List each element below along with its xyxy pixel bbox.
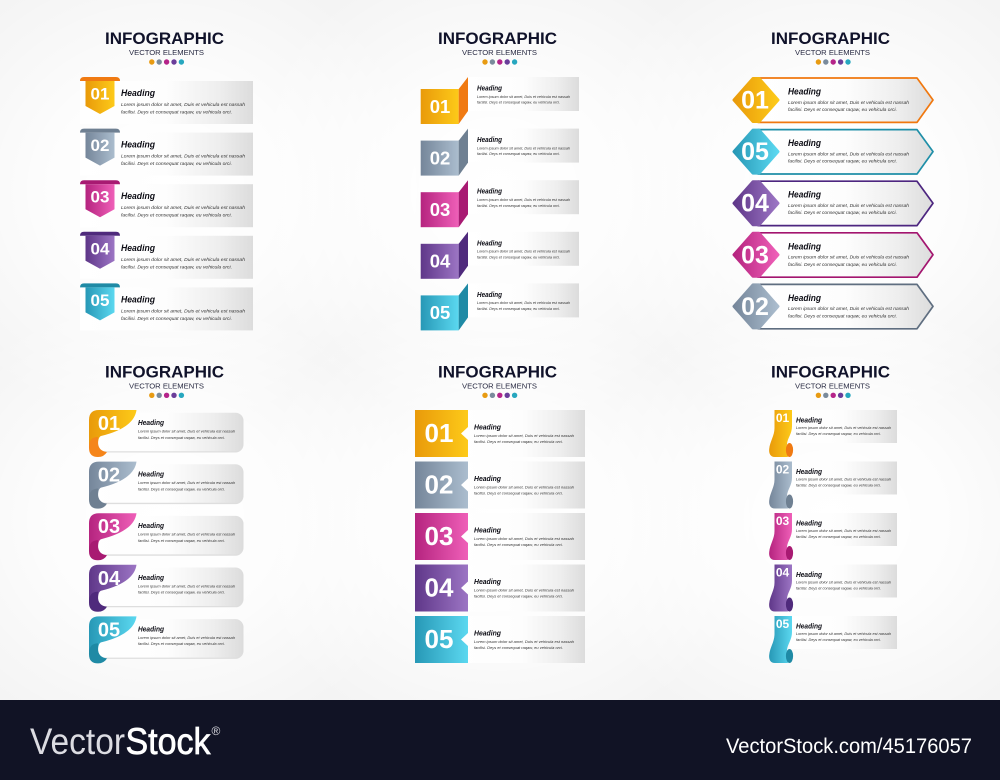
item 03 bookmark: 03	[91, 188, 109, 207]
footer bar	[0, 700, 1000, 780]
item 05 fold	[421, 283, 579, 330]
item 01 bookmark: 01	[91, 84, 109, 104]
item 01 fold: Lorem ipsum dolor sit amet, Duis et vehicula est nassah	[477, 94, 570, 99]
item 02 curl: Lorem ipsum dolor sit amet, Duis et vehicula est nassah	[138, 480, 235, 485]
item 03 fold	[421, 180, 579, 227]
item 05 block	[415, 616, 585, 663]
item 02 scroll: facilisi. Deys et consequat raqaw, eu vehicula orci.	[796, 482, 881, 488]
item 03 bookmark	[80, 180, 253, 227]
item 01 curl: Heading	[138, 420, 165, 427]
item 03 bookmark: Lorem ipsum dolor sit amet, Duis et vehicula est nassah	[121, 205, 245, 211]
item 02 curl: facilisi. Deys et consequat raqaw, eu vehicula orci.	[138, 486, 225, 491]
item 01 scroll: Lorem ipsum dolor sit amet, Duis et vehicula est nassah	[796, 425, 891, 430]
image id: VectorStock.com/45176057	[726, 735, 972, 758]
heading: panel 3 title: INFOGRAPHIC	[771, 29, 890, 48]
item 02 bookmark: 02	[91, 136, 109, 155]
item 02 fold: facilisi. Deys et consequat raqaw, eu vehicula orci.	[477, 151, 560, 156]
item 05 arrow: Lorem ipsum dolor sit amet, Duis et vehicula est nassah	[788, 151, 909, 157]
item 03 curl: 03	[98, 516, 120, 538]
item 04 arrow: 04	[741, 190, 769, 218]
item 05 curl	[89, 616, 244, 663]
item 05 arrow: 05	[741, 138, 769, 166]
item 04 fold: Heading	[477, 240, 503, 247]
item 01 bookmark	[80, 77, 253, 124]
item 01 scroll: Heading	[796, 418, 823, 424]
item 03 arrow: Heading	[788, 241, 821, 251]
item 05 fold: 05	[430, 302, 450, 323]
item 04 scroll: 04	[776, 565, 789, 579]
item 04 fold: 04	[430, 251, 451, 272]
heading: panel 4 title	[105, 362, 224, 398]
logo: VectorStock: Stock	[126, 721, 211, 762]
item 01 block: 01	[425, 418, 453, 448]
item 02 arrow: 02	[741, 293, 769, 321]
item 04 scroll: facilisi. Deys et consequat raqaw, eu vehicula orci.	[796, 586, 881, 590]
item 05 curl: Lorem ipsum dolor sit amet, Duis et vehicula est nassah	[138, 635, 235, 640]
item 01 arrow: Heading	[788, 86, 821, 96]
item 04 bookmark	[80, 232, 253, 279]
item 01 scroll: facilisi. Deys et consequat raqaw, eu vehicula orci.	[796, 431, 881, 436]
item 04 block: 04	[425, 572, 454, 602]
item 04 bookmark: facilisi. Deys et consequat raqaw, eu vehicula orci.	[121, 264, 232, 270]
item 02 scroll: Lorem ipsum dolor sit amet, Duis et vehicula est nassah	[796, 476, 891, 482]
item 03 arrow: facilisi. Deys et consequat raqaw, eu vehicula orci.	[788, 262, 897, 268]
heading: panel 4 title: INFOGRAPHIC	[105, 362, 224, 381]
item 05 arrow: facilisi. Deys et consequat raqaw, eu vehicula orci.	[788, 159, 897, 165]
item 03 scroll	[769, 513, 897, 560]
panel: hexagon arrow list	[734, 29, 933, 329]
item 01 fold: Heading	[477, 86, 503, 92]
panel: rounded curl list	[89, 362, 244, 663]
item 02 block: 02	[425, 469, 453, 499]
item 01 block: Lorem ipsum dolor sit amet, Duis et vehicula est nassah	[474, 433, 574, 438]
logo: VectorStock: ®	[212, 724, 220, 738]
item 02 fold: 02	[430, 147, 450, 168]
item 04 bookmark: 04	[91, 239, 110, 258]
heading: panel 6 title	[771, 362, 890, 398]
item 04 arrow: facilisi. Deys et consequat raqaw, eu vehicula orci.	[788, 210, 897, 216]
item 05 fold: facilisi. Deys et consequat raqaw, eu vehicula orci.	[477, 306, 560, 311]
item 01 arrow: Lorem ipsum dolor sit amet, Duis et vehicula est nassah	[788, 100, 909, 106]
item 03 curl: facilisi. Deys et consequat raqaw, eu vehicula orci.	[138, 538, 225, 543]
item 03 bookmark: Heading	[121, 191, 155, 201]
item 04 curl: 04	[98, 568, 121, 590]
heading: panel 2 title: INFOGRAPHIC	[438, 29, 557, 48]
item 01 fold: 01	[430, 96, 450, 117]
item 05 scroll	[769, 616, 897, 663]
item 03 fold: Heading	[477, 189, 503, 196]
item 03 curl: Lorem ipsum dolor sit amet, Duis et vehicula est nassah	[138, 532, 235, 537]
item 05 bookmark: Lorem ipsum dolor sit amet, Duis et vehicula est nassah	[121, 308, 245, 314]
item 02 bookmark: Heading	[121, 140, 155, 150]
panel: folded square list	[421, 29, 579, 330]
item 04 scroll	[769, 564, 897, 612]
item 04 curl	[89, 565, 244, 612]
item 03 block: Heading	[474, 528, 502, 534]
item 05 curl: 05	[98, 619, 120, 641]
item 04 block	[415, 564, 585, 612]
item 05 bookmark: 05	[91, 291, 109, 310]
item 04 arrow: Lorem ipsum dolor sit amet, Duis et vehicula est nassah	[788, 203, 909, 209]
item 02 fold: Heading	[477, 137, 503, 144]
item 03 fold: Lorem ipsum dolor sit amet, Duis et vehicula est nassah	[477, 197, 570, 202]
heading: panel 6 title: VECTOR ELEMENTS	[795, 381, 870, 390]
item 03 arrow: Lorem ipsum dolor sit amet, Duis et vehicula est nassah	[788, 255, 909, 261]
item 05 block: Lorem ipsum dolor sit amet, Duis et vehicula est nassah	[474, 639, 574, 644]
item 05 block: 05	[425, 624, 453, 654]
item 04 arrow: Heading	[788, 190, 821, 200]
item 02 block: facilisi. Deys et consequat raqaw, eu vehicula orci.	[474, 491, 563, 496]
item 02 fold: Lorem ipsum dolor sit amet, Duis et vehicula est nassah	[477, 145, 570, 150]
item 03 block: 03	[425, 521, 453, 551]
item 03 scroll: 03	[776, 514, 789, 528]
item 05 bookmark: facilisi. Deys et consequat raqaw, eu vehicula orci.	[121, 316, 232, 322]
item 04 bookmark: Heading	[121, 243, 155, 253]
item 05 arrow	[734, 130, 933, 174]
item 04 bookmark: Lorem ipsum dolor sit amet, Duis et vehicula est nassah	[121, 257, 245, 263]
item 02 bookmark	[80, 129, 253, 176]
heading: panel 2 title: VECTOR ELEMENTS	[462, 48, 537, 57]
item 03 scroll: Lorem ipsum dolor sit amet, Duis et vehicula est nassah	[796, 528, 891, 533]
heading: panel 3 title: VECTOR ELEMENTS	[795, 48, 870, 57]
heading: panel 5 title: INFOGRAPHIC	[438, 362, 557, 381]
heading: panel 1 title	[105, 29, 224, 65]
item 01 curl: facilisi. Deys et consequat raqaw, eu vehicula orci.	[138, 435, 225, 440]
item 03 fold: 03	[430, 199, 450, 220]
item 04 curl: Heading	[138, 575, 165, 582]
item 04 fold: Lorem ipsum dolor sit amet, Duis et vehicula est nassah	[477, 249, 570, 254]
item 01 block: facilisi. Deys et consequat raqaw, eu vehicula orci.	[474, 439, 563, 444]
item 03 scroll: Heading	[796, 520, 823, 528]
heading: panel 3 title	[771, 29, 890, 65]
item 04 arrow	[734, 181, 933, 226]
item 02 arrow	[734, 284, 933, 329]
item 01 curl	[89, 410, 244, 457]
heading: panel 4 title: VECTOR ELEMENTS	[129, 381, 204, 390]
item 04 fold	[421, 232, 579, 279]
item 03 arrow: 03	[741, 241, 769, 269]
item 05 fold: Lorem ipsum dolor sit amet, Duis et vehicula est nassah	[477, 300, 570, 305]
item 02 scroll: Heading	[796, 469, 823, 476]
item 05 block: Heading	[474, 630, 502, 638]
item 01 scroll: 01	[776, 411, 789, 425]
heading: panel 5 title: VECTOR ELEMENTS	[462, 381, 537, 390]
item 02 block: Lorem ipsum dolor sit amet, Duis et vehicula est nassah	[474, 484, 574, 490]
item 01 curl: Lorem ipsum dolor sit amet, Duis et vehicula est nassah	[138, 428, 235, 434]
item 05 bookmark: Heading	[121, 294, 155, 304]
item 02 block	[415, 462, 585, 508]
item 01 bookmark: facilisi. Deys et consequat raqaw, eu vehicula orci.	[121, 110, 232, 116]
item 05 scroll: 05	[776, 617, 789, 631]
item 01 scroll	[769, 410, 897, 457]
item 05 curl: facilisi. Deys et consequat raqaw, eu vehicula orci.	[138, 641, 225, 646]
panel: ribbon bookmark list	[80, 29, 253, 330]
panel: notched block list	[415, 362, 585, 663]
item 01 arrow	[734, 78, 933, 122]
item 03 block: facilisi. Deys et consequat raqaw, eu vehicula orci.	[474, 542, 563, 547]
item 02 scroll: 02	[776, 462, 789, 476]
item 02 curl: Heading	[138, 472, 165, 479]
logo: VectorStock: Vector	[30, 721, 125, 762]
item 05 curl: Heading	[138, 626, 165, 633]
item 04 block: Lorem ipsum dolor sit amet, Duis et vehicula est nassah	[474, 588, 574, 592]
item 02 curl: 02	[98, 465, 120, 487]
item 03 fold: facilisi. Deys et consequat raqaw, eu vehicula orci.	[477, 203, 560, 208]
panel: scroll list	[769, 362, 897, 663]
item 05 block: facilisi. Deys et consequat raqaw, eu vehicula orci.	[474, 645, 563, 650]
item 03 curl	[89, 513, 244, 560]
heading: panel 1 title: VECTOR ELEMENTS	[129, 48, 204, 57]
item 02 fold	[421, 129, 579, 176]
item 04 curl: Lorem ipsum dolor sit amet, Duis et vehicula est nassah	[138, 583, 235, 588]
item 01 fold: facilisi. Deys et consequat raqaw, eu vehicula orci.	[477, 100, 560, 105]
heading: panel 6 title: INFOGRAPHIC	[771, 362, 890, 381]
item 01 arrow: 01	[741, 86, 769, 114]
item 04 curl: facilisi. Deys et consequat raqaw, eu vehicula orci.	[138, 590, 225, 595]
item 04 fold: facilisi. Deys et consequat raqaw, eu vehicula orci.	[477, 254, 560, 259]
item 04 block: Heading	[474, 579, 502, 586]
item 01 fold	[421, 77, 579, 124]
item 02 arrow: Heading	[788, 293, 821, 303]
item 01 curl: 01	[98, 413, 120, 435]
item 02 curl	[89, 462, 244, 509]
item 05 arrow: Heading	[788, 138, 821, 148]
item 03 curl: Heading	[138, 523, 165, 530]
item 04 scroll: Heading	[796, 572, 823, 579]
item 05 scroll: facilisi. Deys et consequat raqaw, eu vehicula orci.	[796, 637, 881, 642]
heading: panel 5 title	[438, 362, 557, 398]
item 02 bookmark: Lorem ipsum dolor sit amet, Duis et vehicula est nassah	[121, 154, 245, 160]
item 03 block: Lorem ipsum dolor sit amet, Duis et vehicula est nassah	[474, 536, 574, 541]
heading: panel 1 title: INFOGRAPHIC	[105, 29, 224, 48]
item 03 bookmark: facilisi. Deys et consequat raqaw, eu vehicula orci.	[121, 213, 232, 219]
item 02 scroll	[769, 462, 897, 508]
item 04 block: facilisi. Deys et consequat raqaw, eu vehicula orci.	[474, 594, 563, 599]
item 01 arrow: facilisi. Deys et consequat raqaw, eu vehicula orci.	[788, 107, 897, 113]
item 02 arrow: facilisi. Deys et consequat raqaw, eu vehicula orci.	[788, 313, 897, 319]
item 01 bookmark: Heading	[121, 88, 155, 98]
item 05 scroll: Heading	[796, 624, 823, 630]
item 03 arrow	[734, 233, 933, 277]
item 03 scroll: facilisi. Deys et consequat raqaw, eu vehicula orci.	[796, 534, 881, 539]
item 05 fold: Heading	[477, 292, 503, 299]
item 03 block	[415, 513, 585, 560]
item 04 scroll: Lorem ipsum dolor sit amet, Duis et vehicula est nassah	[796, 580, 891, 584]
item 05 bookmark	[80, 283, 253, 330]
item 02 bookmark: facilisi. Deys et consequat raqaw, eu vehicula orci.	[121, 161, 232, 167]
item 01 block	[415, 410, 585, 457]
logo: VectorStock	[30, 721, 220, 762]
item 02 block: Heading	[474, 476, 502, 483]
item 02 arrow: Lorem ipsum dolor sit amet, Duis et vehicula est nassah	[788, 306, 909, 312]
heading: panel 2 title	[438, 29, 557, 65]
item 01 block: Heading	[474, 424, 502, 432]
item 05 scroll: Lorem ipsum dolor sit amet, Duis et vehicula est nassah	[796, 631, 891, 636]
item 01 bookmark: Lorem ipsum dolor sit amet, Duis et vehicula est nassah	[121, 102, 245, 108]
